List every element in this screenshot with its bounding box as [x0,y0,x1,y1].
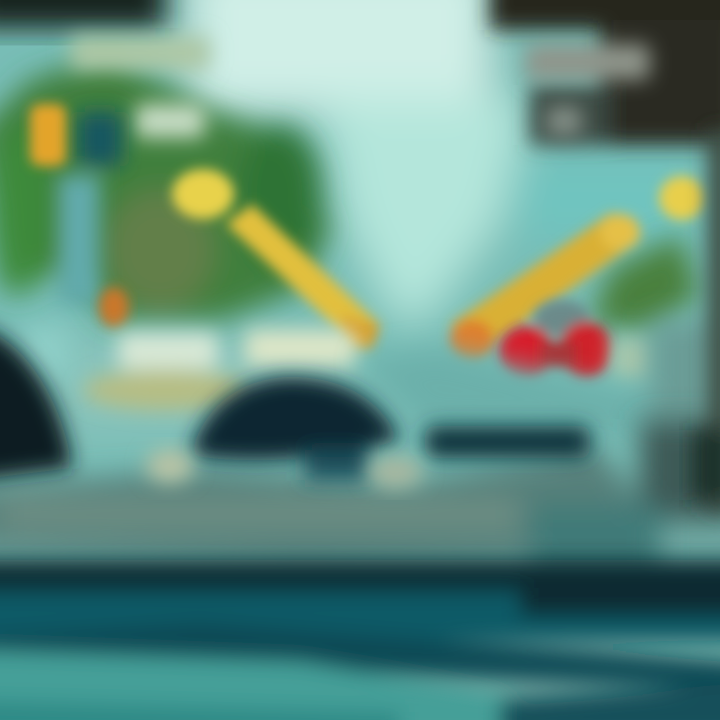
icon: left vertical teal column [58,112,122,305]
icon: right dark edge [692,130,720,510]
panel: right green foliage [590,235,700,330]
panel: lower grey-green band [0,420,720,585]
icon: central dark dome [190,377,590,480]
panel: top right dark corner [490,0,720,145]
icon: orange marker [30,104,66,166]
heading: blurred title left [70,36,210,138]
arrow: left yellow arrow [172,169,380,350]
heading: blurred title right [525,44,650,136]
icon: small orange dot [99,287,129,327]
panel: top left dark corner [0,0,165,28]
text block: blurred pale caption [83,330,652,410]
panel: bottom water bands [0,560,720,720]
arrow: right yellow arrow [450,176,705,360]
background: teal sky [0,0,720,500]
text block: pale lower dots [146,449,423,488]
panel: left green foliage [0,55,330,320]
icon: left dark shape [0,325,72,480]
icon: red cherries [499,300,612,378]
panel: mid teal band [20,320,720,435]
